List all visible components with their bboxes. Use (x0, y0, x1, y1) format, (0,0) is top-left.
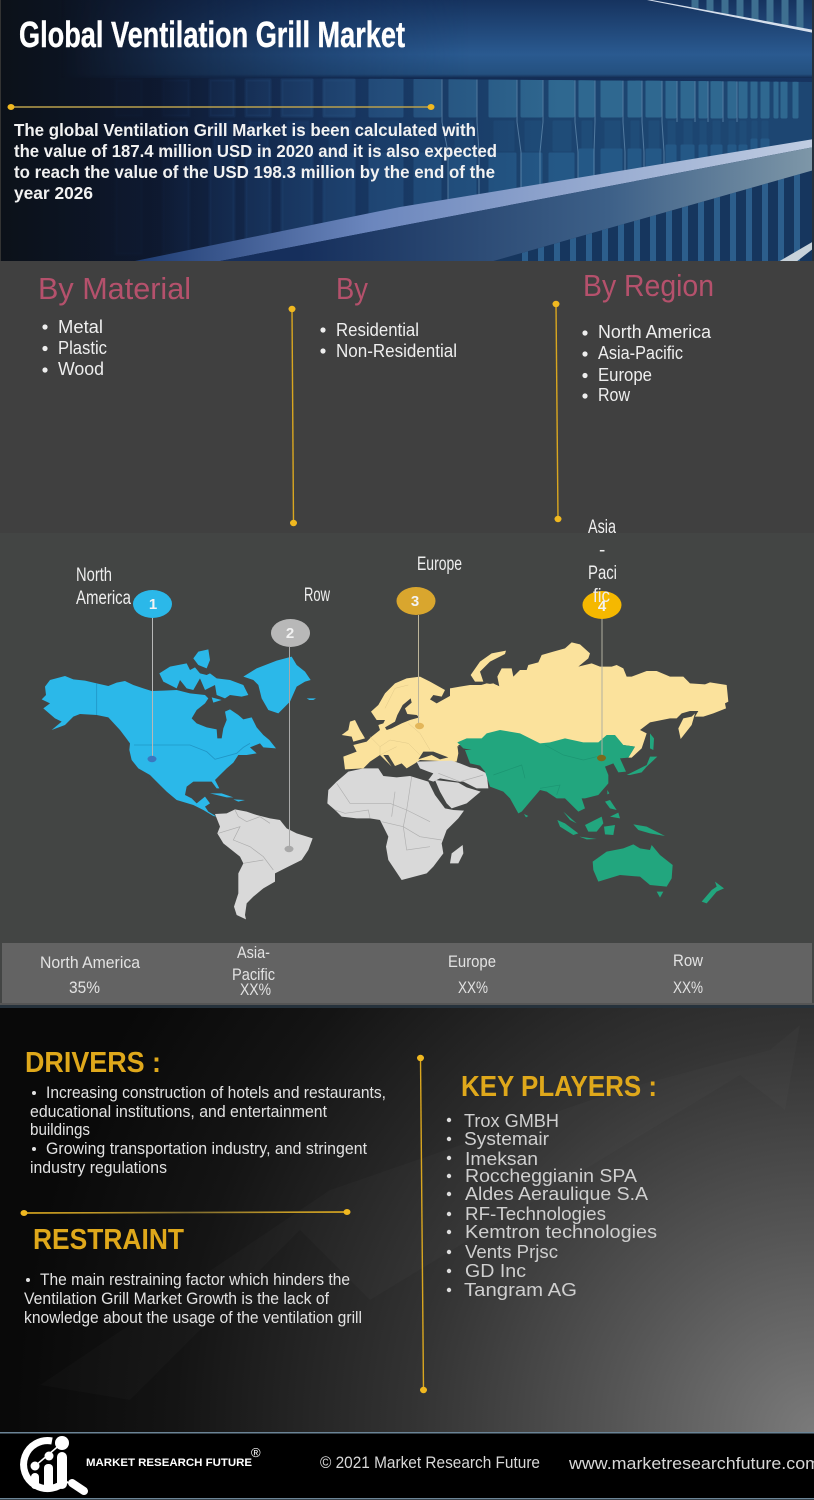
text block: market summary: to reach the value of the USD 198.3 million by the end of the (14, 162, 495, 182)
map label: north america: America (76, 588, 131, 609)
panel: segmentation background (0, 261, 814, 533)
top right grill (695, 0, 800, 30)
list: end uses (320, 320, 457, 361)
text block: restraint: Ventilation Grill Market Growth is the lack of (24, 1289, 329, 1308)
stat: europe: XX% (458, 979, 488, 997)
list: key players: Roccheggianin SPA (465, 1166, 637, 1186)
asia mainland (457, 730, 635, 813)
grill pattern (164, 78, 812, 254)
stat: row: XX% (673, 979, 703, 997)
list: key players: Imeksan (465, 1149, 538, 1169)
list: key players: RF-Technologies (465, 1204, 606, 1224)
stat: europe (448, 953, 496, 997)
column: by end use (320, 271, 457, 361)
panel: map background (0, 533, 814, 1005)
list: regions: Europe (598, 365, 652, 385)
list: end uses: Non-Residential (336, 341, 457, 361)
map label: asia-pacific: - (599, 540, 605, 561)
south america (215, 809, 313, 919)
list: materials: Plastic (58, 338, 107, 358)
text block: market summary: year 2026 (14, 183, 93, 203)
marker: row: 2 (286, 625, 294, 642)
region: americas (42, 649, 316, 919)
list: materials: Wood (58, 359, 104, 379)
list: key players: Tangram AG (464, 1280, 577, 1300)
panel: drivers, restraint and key players (0, 1008, 814, 1432)
text block: market summary: The global Ventilation Grill Market is been calculated with (14, 120, 476, 140)
stat: north america: 35% (69, 979, 100, 997)
stat: row: Row (673, 952, 703, 970)
text block: restraint: The main restraining factor which hinders the (40, 1270, 350, 1289)
region: asia (450, 642, 728, 903)
heading: by region: By Region (583, 268, 714, 303)
stat: asia-pacific: XX% (240, 981, 271, 999)
divider: vertical line one (288, 306, 297, 526)
map label: north america: North (76, 565, 112, 586)
divider: header connector (8, 104, 434, 110)
text block: restraint: knowledge about the usage of the ventilation grill (24, 1308, 362, 1327)
map label: north america (76, 565, 131, 609)
text block: market summary: the value of 187.4 million USD in 2020 and it is also expected (14, 141, 497, 161)
divider: restraint connector (20, 1209, 350, 1216)
divider: vertical line two (552, 301, 562, 522)
stat: north america (40, 954, 141, 997)
north america (42, 649, 316, 817)
list: key players: Trox GMBH (464, 1111, 559, 1131)
map label: europe: Europe (417, 554, 462, 575)
marker: asia-pacific (582, 591, 622, 761)
website: www.marketresearchfuture.com (568, 1454, 814, 1473)
map label: asia-pacific: Paci (588, 563, 617, 584)
diagonal rails (130, 139, 814, 262)
marker: europe: 3 (411, 593, 419, 610)
marker: asia-pacific: 4 (598, 598, 607, 615)
africa and middle east (327, 761, 488, 880)
copyright: © 2021 Market Research Future (320, 1454, 540, 1472)
marker: north america (133, 590, 172, 762)
world map (42, 642, 728, 919)
list: key players (447, 1111, 657, 1300)
stat: north america: North America (40, 954, 141, 972)
stat: asia-pacific (232, 944, 275, 999)
europe (342, 651, 533, 769)
text block: drivers: educational institutions, and entertainment (30, 1102, 327, 1121)
list: materials: Metal (58, 317, 103, 337)
list: key players: Kemtron technologies (465, 1222, 657, 1242)
panel: header banner (0, 0, 814, 262)
list: key players: GD Inc (465, 1261, 526, 1281)
list: end uses: Residential (336, 320, 419, 340)
map label: asia-pacific: fic (593, 586, 610, 607)
list: regions: Asia-Pacific (598, 343, 683, 363)
registered mark: ® (251, 1445, 261, 1460)
divider: vertical line three (417, 1055, 427, 1393)
column: by region (582, 268, 714, 405)
list: regions: Row (598, 385, 631, 405)
marker: europe (396, 587, 436, 729)
map label: asia-pacific (588, 517, 617, 607)
list: key players: Aldes Aeraulique S.A (465, 1184, 648, 1204)
region: europe africa middle east (327, 651, 533, 880)
panel: footer (0, 1432, 814, 1500)
stat: europe: Europe (448, 953, 496, 971)
russia (450, 642, 728, 758)
icon: market research future logo (24, 1436, 84, 1491)
panel: regional share bar (0, 943, 814, 1008)
map label: asia-pacific: Asia (588, 517, 616, 538)
lower right grill (496, 239, 576, 261)
text block: drivers: industry regulations (30, 1158, 167, 1177)
borders (97, 683, 250, 759)
heading: key players: KEY PLAYERS : (461, 1071, 657, 1103)
list: regions (582, 322, 712, 405)
column: by material (38, 271, 191, 379)
text block: drivers: Growing transportation industry, and stringent (46, 1139, 367, 1158)
text block: drivers: Increasing construction of hotels and restaurants, (46, 1083, 386, 1102)
islands (524, 733, 724, 903)
heading: by: By (336, 271, 368, 306)
list: materials (42, 317, 107, 379)
map label: row: Row (304, 585, 330, 606)
list: regions: North America (598, 322, 712, 342)
marker: north america: 1 (149, 596, 157, 613)
marker: row (271, 619, 310, 852)
stat: asia-pacific: Pacific (232, 966, 275, 984)
title: Global Ventilation Grill Market (19, 14, 405, 55)
stat: row (673, 952, 703, 997)
stat: asia-pacific: Asia- (237, 944, 270, 962)
brand name: MARKET RESEARCH FUTURE (86, 1457, 252, 1469)
text block: market summary (14, 120, 497, 203)
list: key players: Systemair (464, 1129, 549, 1149)
heading: by material: By Material (38, 271, 191, 306)
text block: restraint (24, 1270, 362, 1327)
list: key players: Vents Prjsc (465, 1242, 558, 1262)
text block: drivers: buildings (30, 1120, 90, 1139)
heading: restraint: RESTRAINT (33, 1224, 184, 1256)
heading: drivers: DRIVERS : (25, 1047, 161, 1079)
seas (385, 698, 471, 768)
text block: drivers (30, 1083, 386, 1177)
